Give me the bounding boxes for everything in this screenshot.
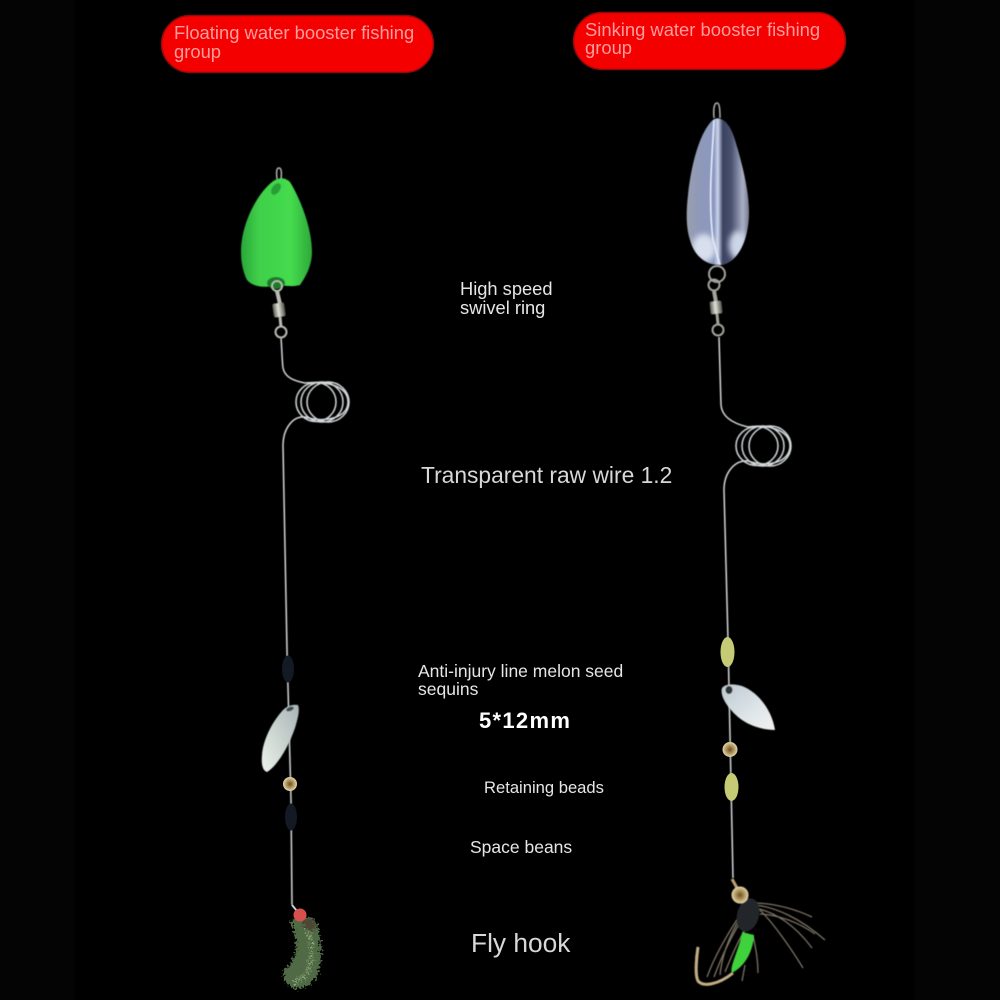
text label: retaining beads: Retaining beads xyxy=(484,778,604,797)
text label: transparent raw wire: Transparent raw wire 1.2 xyxy=(421,462,672,488)
icon: black space bean lower xyxy=(285,804,297,830)
floating rig wire with coil xyxy=(281,338,349,905)
text label: high speed swivel ring xyxy=(460,278,552,318)
text label: high speed swivel ring: High speed xyxy=(460,278,552,299)
icon: green nymph fly with hook xyxy=(696,879,825,984)
icon: gold retaining bead xyxy=(283,777,297,791)
icon: black space bean xyxy=(282,656,294,682)
icon: clear teardrop float xyxy=(687,103,749,265)
infographic canvas xyxy=(160,12,846,992)
text label: anti-injury sequins: sequins xyxy=(418,679,479,699)
text label: sequin size: 5*12mm xyxy=(479,708,571,733)
icon: spinner blade, floating rig xyxy=(262,705,299,772)
text label: high speed swivel ring: swivel ring xyxy=(460,297,545,318)
icon: green float xyxy=(241,168,312,289)
text label: space beans: Space beans xyxy=(470,837,572,857)
panel: sinking group heading: group xyxy=(585,37,632,58)
icon: green woolly worm fly xyxy=(283,905,321,989)
icon: yellow sequin upper xyxy=(720,637,734,667)
panel: sinking group heading xyxy=(574,12,846,70)
text label: fly hook: Fly hook xyxy=(471,928,571,958)
panel: floating group heading: group xyxy=(174,41,221,62)
icon: spinner blade, sinking rig xyxy=(722,684,775,730)
text label: anti-injury sequins xyxy=(418,661,623,699)
text label: anti-injury sequins: Anti-injury line melon seed xyxy=(418,661,623,681)
panel: sinking group heading: Sinking water booster fishing xyxy=(585,19,820,40)
sinking rig wire with coil xyxy=(719,337,791,878)
icon: yellow sequin lower xyxy=(724,773,738,801)
icon: gold retaining bead xyxy=(722,742,738,757)
panel: floating group heading: Floating water booster fishing xyxy=(174,22,414,43)
icon: swivel ring, floating rig xyxy=(272,281,286,338)
panel: floating group heading xyxy=(162,16,434,72)
icon: swivel ring, sinking rig xyxy=(708,266,725,336)
